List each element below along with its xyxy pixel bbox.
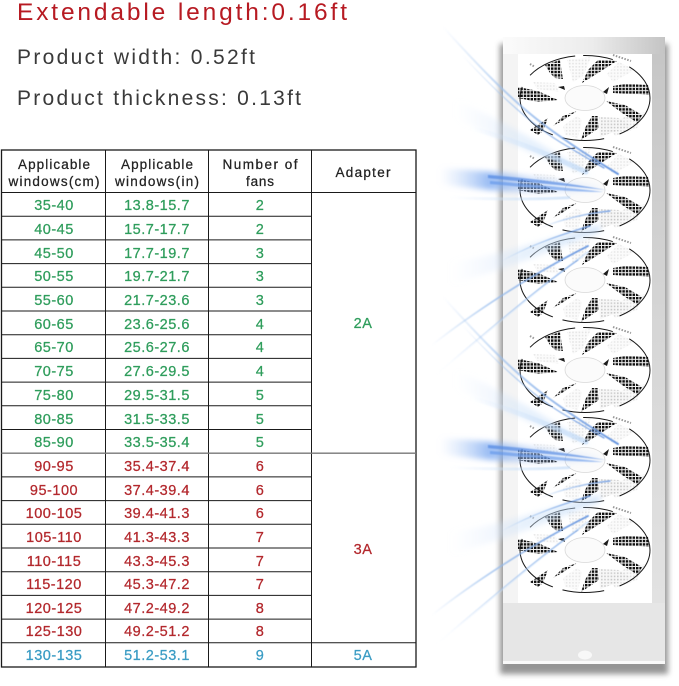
green rows: 2A: 65-70 (34, 340, 74, 356)
red rows: 3A: 125-130 (26, 624, 82, 640)
red rows: 3A: 39.4-41.3 (124, 506, 190, 522)
green rows: 2A: 19.7-21.7 (124, 269, 190, 285)
green rows: 2A: 2 (256, 222, 264, 238)
fan 5 (518, 417, 650, 502)
fan 3 (518, 237, 650, 322)
red rows: 3A: 95-100 (30, 483, 78, 499)
green rows: 2A: 5 (256, 412, 264, 428)
red rows: 3A: 7 (256, 577, 264, 593)
air flow streaks (432, 27, 618, 645)
red rows: 3A: 6 (256, 483, 264, 499)
table header: windows(in) (114, 174, 199, 189)
right side strip (652, 54, 665, 603)
green rows: 2A: 17.7-19.7 (124, 246, 190, 262)
green rows: 2A: 60-65 (34, 317, 74, 333)
green rows: 2A: 35-40 (34, 198, 74, 214)
red rows: 3A: 100-105 (26, 506, 82, 522)
green rows: 2A: 29.5-31.5 (124, 388, 190, 404)
table header: Adapter (336, 165, 391, 180)
text: product thickness: Product thickness: 0.13ft (17, 87, 301, 110)
table header: fans (246, 174, 274, 189)
red rows: 3A (26, 459, 372, 640)
green rows: 2A: 13.8-15.7 (124, 198, 190, 214)
text: product width: Product width: 0.52ft (17, 46, 255, 69)
green rows: 2A: 55-60 (34, 293, 74, 309)
red rows: 3A: 115-120 (26, 577, 82, 593)
red rows: 3A: 7 (256, 554, 264, 570)
green rows: 2A: 70-75 (34, 364, 74, 380)
green rows: 2A: 3 (256, 269, 264, 285)
red rows: 3A: 47.2-49.2 (124, 601, 190, 617)
green rows: 2A: 21.7-23.6 (124, 293, 190, 309)
table header: Applicable (121, 157, 193, 172)
blue row: 5A: 9 (256, 648, 264, 664)
bottom cap (503, 603, 665, 664)
green rows: 2A: 25.6-27.6 (124, 340, 190, 356)
red rows: 3A: 3A (354, 542, 372, 558)
green rows: 2A: 85-90 (34, 435, 74, 451)
upper streak group (432, 27, 618, 375)
blue row: 5A: 51.2-53.1 (124, 648, 190, 664)
fan 1 (518, 55, 650, 140)
green rows: 2A: 75-80 (34, 388, 74, 404)
red rows: 3A: 41.3-43.3 (124, 530, 190, 546)
blue row: 5A (26, 648, 372, 664)
green rows: 2A: 15.7-17.7 (124, 222, 190, 238)
red rows: 3A: 49.2-51.2 (124, 624, 190, 640)
red rows: 3A: 45.3-47.2 (124, 577, 190, 593)
red rows: 3A: 90-95 (34, 459, 74, 475)
compatibility table (2, 150, 416, 667)
green rows: 2A: 45-50 (34, 246, 74, 262)
green rows: 2A: 33.5-35.4 (124, 435, 190, 451)
red rows: 3A: 120-125 (26, 601, 82, 617)
green rows: 2A: 2A (354, 316, 372, 332)
table grid (2, 150, 416, 667)
fan 2 (518, 147, 650, 232)
green rows: 2A: 31.5-33.5 (124, 412, 190, 428)
red rows: 3A: 6 (256, 459, 264, 475)
panel body (503, 37, 665, 664)
green rows: 2A (34, 198, 372, 451)
green rows: 2A: 3 (256, 246, 264, 262)
green rows: 2A: 27.6-29.5 (124, 364, 190, 380)
fan 4 (518, 327, 650, 412)
red rows: 3A: 43.3-45.3 (124, 554, 190, 570)
red rows: 3A: 37.4-39.4 (124, 483, 190, 499)
table header (8, 157, 391, 189)
green rows: 2A: 4 (256, 340, 264, 356)
green rows: 2A: 5 (256, 435, 264, 451)
blue row: 5A: 5A (354, 648, 372, 664)
green rows: 2A: 4 (256, 317, 264, 333)
green rows: 2A: 40-45 (34, 222, 74, 238)
panel shadow (500, 44, 668, 674)
window fan product (500, 37, 668, 674)
red rows: 3A: 35.4-37.4 (124, 459, 190, 475)
table header: Applicable (18, 157, 90, 172)
green rows: 2A: 23.6-25.6 (124, 317, 190, 333)
red rows: 3A: 8 (256, 601, 264, 617)
red rows: 3A: 110-115 (27, 554, 81, 570)
red rows: 3A: 6 (256, 506, 264, 522)
green rows: 2A: 2 (256, 198, 264, 214)
red rows: 3A: 105-110 (26, 530, 82, 546)
blue row: 5A: 130-135 (26, 648, 82, 664)
green rows: 2A: 80-85 (34, 412, 74, 428)
green rows: 2A: 4 (256, 364, 264, 380)
table header: windows(cm) (8, 174, 100, 189)
table header: Number of (222, 157, 298, 172)
top bar (503, 37, 665, 54)
inner white area (518, 54, 652, 603)
green rows: 2A: 5 (256, 388, 264, 404)
lower streak group (432, 297, 618, 645)
green rows: 2A: 50-55 (34, 269, 74, 285)
fan 6 (518, 507, 650, 592)
red rows: 3A: 7 (256, 530, 264, 546)
green rows: 2A: 3 (256, 293, 264, 309)
red rows: 3A: 8 (256, 624, 264, 640)
